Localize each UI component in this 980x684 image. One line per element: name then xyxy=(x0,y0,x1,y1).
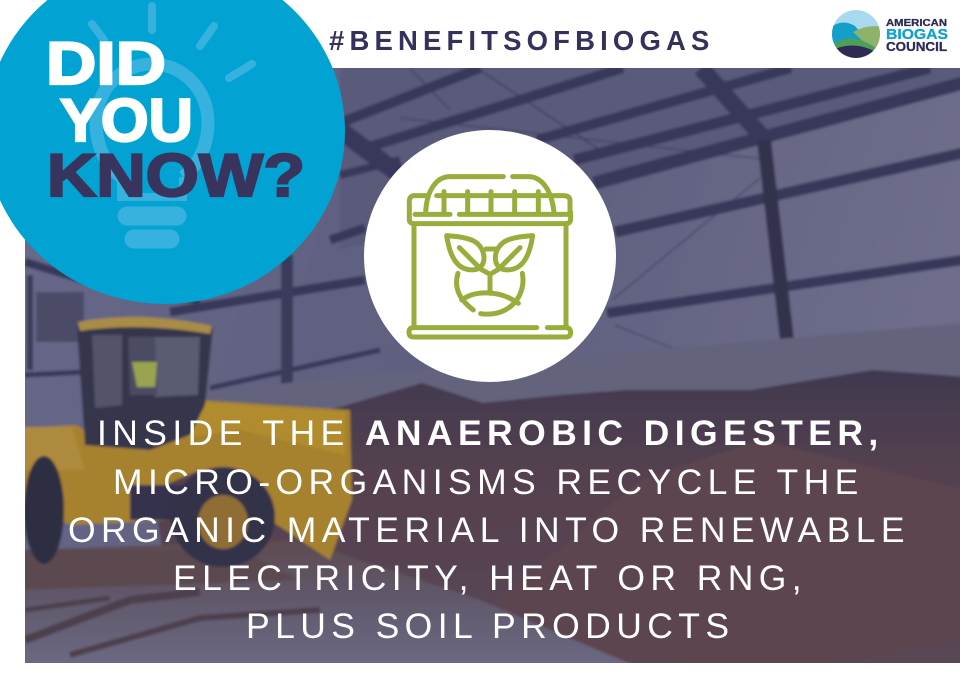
floor xyxy=(20,540,640,668)
roof panels and trusses xyxy=(25,60,965,392)
logo: American Biogas Council xyxy=(830,10,948,60)
body text: INSIDE THE ANAEROBIC DIGESTER, xyxy=(97,413,884,453)
tyres xyxy=(24,456,64,564)
heading: Did You Know xyxy=(46,30,305,209)
logo: American Biogas Council: BIOGAS xyxy=(886,26,948,43)
heading: Did You Know: YOU xyxy=(60,87,193,154)
steel columns xyxy=(757,140,794,340)
loader body xyxy=(20,398,352,560)
louvre vent xyxy=(36,292,84,342)
body text: ORGANIC MATERIAL INTO RENEWABLE xyxy=(68,510,910,550)
compost mound xyxy=(150,370,965,668)
logo wordmark: AMERICAN xyxy=(886,18,947,29)
logo: American Biogas Council: COUNCIL xyxy=(886,39,947,54)
body text: MICRO-ORGANISMS RECYCLE THE xyxy=(113,462,864,502)
wall girts xyxy=(25,153,963,392)
hashtag heading: #BENEFITSOFBIOGAS xyxy=(329,25,714,56)
body text: PLUS SOIL PRODUCTS xyxy=(246,606,734,646)
cab xyxy=(77,327,213,450)
heading: Did You Know: KNOW? xyxy=(47,142,305,209)
icon: light bulb xyxy=(92,6,252,239)
body text xyxy=(68,413,910,646)
body text: ELECTRICITY, HEAT OR RNG, xyxy=(173,558,807,598)
icon: digester with leaves xyxy=(409,177,571,337)
concrete wall xyxy=(280,324,960,389)
logo mark xyxy=(832,10,880,58)
heading: Did You Know: DID xyxy=(46,30,166,97)
callout: blue Did You Know circle xyxy=(0,0,345,304)
icon badge: white circle xyxy=(364,130,616,382)
undercarriage shadow xyxy=(130,485,190,520)
operator vest xyxy=(132,362,157,387)
wheel loader xyxy=(20,317,352,567)
